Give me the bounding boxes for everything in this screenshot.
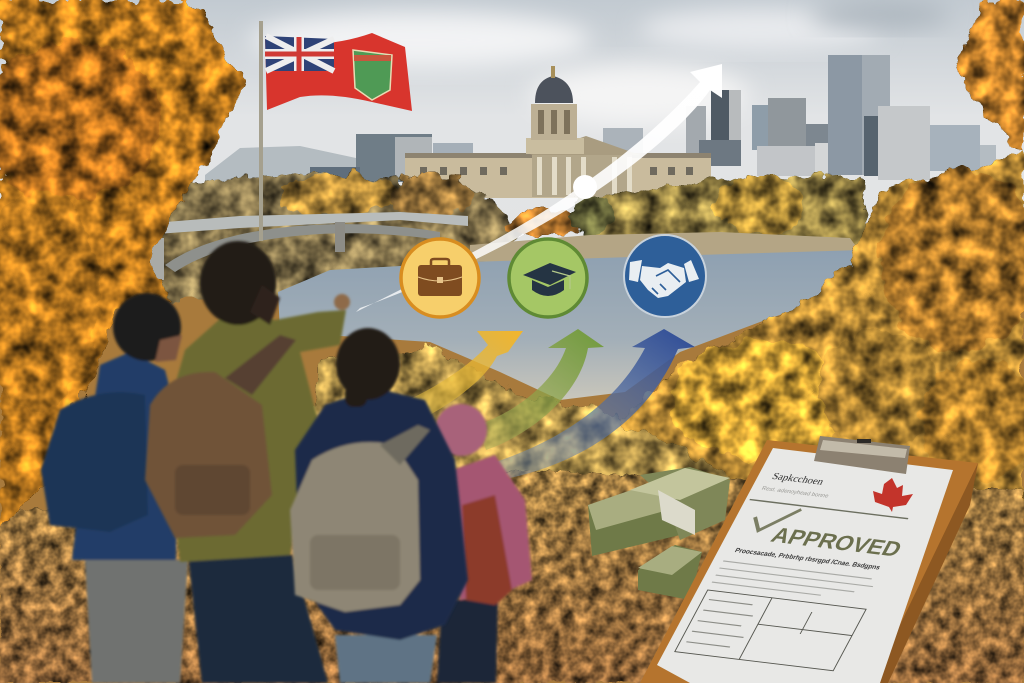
cash stacks (588, 467, 730, 600)
distant hills (205, 146, 356, 200)
metal clip (814, 436, 910, 474)
person: woman in navy coat (290, 328, 468, 683)
person: child in pink (435, 404, 532, 683)
Manitoba flag (265, 33, 412, 111)
approved document: Rest. adenoyhead bonne (760, 486, 830, 500)
legislative building with dome (405, 66, 711, 198)
grey backpack (290, 442, 420, 612)
pathway arrow: blue (496, 329, 695, 478)
family group (41, 241, 532, 683)
maple leaf (873, 478, 913, 512)
union jack canton (265, 36, 334, 71)
clipboard (640, 436, 978, 683)
right foreground autumn trees (610, 0, 1024, 510)
document title: Sapkcchoen (770, 472, 826, 488)
far shore autumn trees (120, 172, 870, 300)
left autumn tree (0, 0, 245, 530)
pathway arrow: yellow (408, 331, 523, 420)
person: boy with blue hoodie (41, 293, 188, 683)
icon: graduation cap badge (509, 239, 587, 317)
icon: handshake badge (624, 235, 706, 317)
leaf-covered ground (0, 470, 1024, 683)
shield (353, 50, 392, 100)
check mark (749, 505, 801, 534)
form table (675, 590, 866, 671)
form subtitle: Proocsacade, Prbbrhp rbsrgpd /Cnae. Bsdgpns (733, 548, 881, 571)
river bank (470, 232, 860, 262)
body copy lines (712, 561, 877, 601)
near slope behind family (300, 345, 740, 520)
white growth arrow (356, 64, 722, 312)
approved document (657, 448, 953, 683)
river (278, 250, 862, 400)
pathway arrow: green (478, 329, 604, 450)
city skyline (310, 55, 996, 185)
red backpack (462, 495, 512, 605)
brown backpack (145, 372, 272, 538)
sky with clouds (0, 0, 1024, 260)
icon: briefcase badge (401, 239, 479, 317)
navy backpack (41, 392, 148, 532)
flag pole (259, 21, 263, 241)
person: man in olive jacket (145, 241, 350, 683)
approved stamp text: APPROVED (767, 523, 906, 561)
bridge (92, 212, 468, 280)
